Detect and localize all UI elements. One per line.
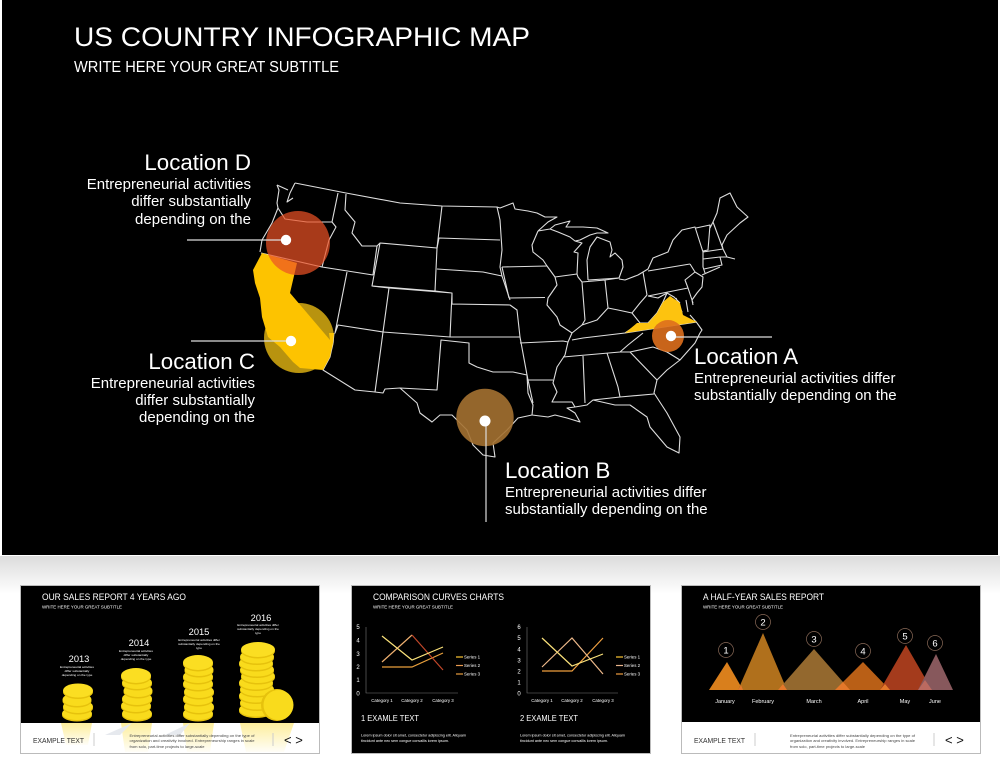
year label 2014: Entrepreneurial activities xyxy=(119,649,153,653)
numbered markers: 2 xyxy=(760,618,766,628)
panel: half-year sales thumbnail xyxy=(682,586,980,754)
leader line and dot: location D xyxy=(187,235,291,245)
line chart 1: 3 xyxy=(356,652,360,658)
month labels: March xyxy=(806,699,822,705)
line chart 1: Category 1 xyxy=(371,698,393,703)
year label 2013: Entrepreneurial activities xyxy=(60,665,94,669)
chart 1 caption: Lorem ipsum dolor sit amet, consectetur adipiscing elit. Aliquam xyxy=(361,732,466,738)
text block: location B: Entrepreneurial activities differ xyxy=(505,484,706,501)
footer description: Entrepreneurial activities differ substantially depending on the type of xyxy=(130,733,255,738)
line chart 2: 6 xyxy=(517,625,521,631)
footer arrows: < > xyxy=(945,732,964,748)
line chart 1: 2 xyxy=(356,665,360,671)
year label 2013: 2013 xyxy=(69,654,89,664)
subheading: WRITE HERE YOUR GREAT SUBTITLE xyxy=(373,604,453,610)
line chart 2: 0 xyxy=(517,692,521,698)
footer description: Entrepreneurial activities differ substantially depending on the type of xyxy=(790,733,916,738)
panel: comparison curves thumbnail xyxy=(352,586,650,754)
footer description: organization and creativity involved. Entrepreneurship ranges in scale xyxy=(130,738,254,743)
footer description: from solo, part-time projects to large-scale xyxy=(130,744,204,749)
text block: location D: differ substantially xyxy=(131,193,251,210)
subheading: WRITE HERE YOUR GREAT SUBTITLE xyxy=(703,604,783,610)
chart 1 caption xyxy=(361,714,466,743)
year label 2016: type xyxy=(255,631,261,635)
panel: sales report thumbnail xyxy=(20,586,320,754)
year label 2015: Entrepreneurial activities differ xyxy=(178,638,220,642)
year label 2015: substantially depending on the xyxy=(178,642,220,646)
leader line and dot: location A xyxy=(666,331,772,341)
chart 2 caption: tincidunt ante nec sem congue convallis lorem ipsum. xyxy=(520,738,608,743)
footer description xyxy=(130,733,255,749)
line chart 2: 4 xyxy=(517,648,521,654)
marker circle: location A xyxy=(652,320,684,352)
large leaning coin xyxy=(261,689,294,721)
numbered markers: 6 xyxy=(932,638,938,650)
text block: location A: Location A xyxy=(694,344,798,369)
year label 2015: type xyxy=(196,646,202,650)
line chart 2: 1 xyxy=(517,680,521,686)
line chart 2: Series 3 xyxy=(624,672,641,676)
chart 1 caption: tincidunt ante nec sem congue convallis lorem ipsum. xyxy=(361,738,449,743)
line chart 2: Series 1 xyxy=(624,654,641,660)
line chart 2: 5 xyxy=(517,636,521,642)
marker circle: location C xyxy=(264,303,334,373)
line chart 2: Category 3 xyxy=(592,698,614,703)
year label 2016: 2016 xyxy=(251,613,271,623)
triangle chart xyxy=(709,633,953,690)
line chart 1: Series 2 xyxy=(464,663,481,668)
chart 1 caption: 1 EXAMLE TEXT xyxy=(361,714,419,723)
month labels: April xyxy=(857,699,869,705)
line chart 1: 0 xyxy=(356,692,360,698)
state highlight: Virginia xyxy=(625,296,697,333)
numbered markers: 1 xyxy=(723,646,729,656)
year label 2016: Entrepreneurial activities differ xyxy=(237,623,279,627)
title: US COUNTRY INFOGRAPHIC MAP xyxy=(74,22,530,52)
year label 2013: differ substantially xyxy=(65,669,90,673)
heading: A HALF-YEAR SALES REPORT xyxy=(703,592,825,602)
text block: location A xyxy=(694,344,897,404)
marker circle: location B xyxy=(456,389,514,446)
text block: location C: differ substantially xyxy=(135,392,255,409)
line chart 1: 1 xyxy=(356,678,360,684)
footer label: EXAMPLE TEXT xyxy=(694,736,746,745)
footer arrows: < > xyxy=(284,732,303,748)
line chart 1: Category 3 xyxy=(432,698,454,703)
numbered markers: 4 xyxy=(860,646,866,658)
text block: location C: depending on the xyxy=(139,409,255,426)
text block: location B xyxy=(505,458,708,518)
heading: OUR SALES REPORT 4 YEARS AGO xyxy=(42,592,186,602)
line chart 1: 4 xyxy=(356,638,360,644)
year label 2015 xyxy=(178,627,220,650)
panel: main US map slide xyxy=(2,0,998,555)
text block: location C: Entrepreneurial activities xyxy=(91,375,255,392)
chart 2 caption: Lorem ipsum dolor sit amet, consectetur adipiscing elit. Aliquam xyxy=(520,732,625,738)
leader line and dot: location C xyxy=(191,336,296,346)
year label 2013: depending on the type xyxy=(62,673,93,677)
marker circle: location D xyxy=(266,211,330,275)
text block: location C xyxy=(91,349,255,426)
line chart 2: Series 2 xyxy=(624,663,641,668)
text block: location D: Entrepreneurial activities xyxy=(87,176,251,193)
month labels: January xyxy=(715,699,735,705)
line chart 1: Series 3 xyxy=(464,672,481,676)
numbered markers xyxy=(718,614,942,658)
text block: location A: substantially depending on the xyxy=(694,387,897,404)
line chart 2: Category 2 xyxy=(561,698,583,703)
line chart 2: 3 xyxy=(517,658,521,664)
year label 2013 xyxy=(60,654,94,677)
subheading: WRITE HERE YOUR GREAT SUBTITLE xyxy=(42,604,122,610)
numbered markers: 5 xyxy=(902,632,908,642)
heading: COMPARISON CURVES CHARTS xyxy=(373,592,504,602)
text block: location D: Location D xyxy=(144,150,251,175)
line chart 1: Series 1 xyxy=(464,654,481,660)
text block: location D: depending on the xyxy=(135,211,251,228)
line chart 2 xyxy=(517,625,641,703)
footer label: EXAMPLE TEXT xyxy=(33,736,85,745)
numbered markers: 3 xyxy=(811,634,817,646)
text block: location C: Location C xyxy=(148,349,255,374)
state highlight: California xyxy=(253,253,334,370)
month labels xyxy=(715,699,941,705)
coin stack 2016 xyxy=(239,642,275,718)
line chart 1: 5 xyxy=(356,625,360,631)
line chart 1: Category 2 xyxy=(401,698,423,703)
US map state outlines xyxy=(260,183,748,457)
month labels: February xyxy=(752,699,774,705)
month labels: May xyxy=(900,699,910,705)
leader line and dot: location B xyxy=(480,416,490,522)
line chart 1 xyxy=(356,625,481,703)
footer reflection of coins xyxy=(61,723,294,752)
year label 2014: 2014 xyxy=(129,638,149,648)
text block: location B: Location B xyxy=(505,458,610,483)
text block: location B: substantially depending on the xyxy=(505,501,708,518)
chart 2 caption xyxy=(520,714,625,743)
line chart 2: Category 1 xyxy=(531,698,553,703)
year label 2014: depending on the type xyxy=(121,657,152,661)
text block: location A: Entrepreneurial activities differ xyxy=(694,370,896,387)
subtitle: WRITE HERE YOUR GREAT SUBTITLE xyxy=(74,59,339,76)
year label 2016: substantially depending on the xyxy=(237,627,279,631)
line chart 2: 2 xyxy=(517,670,521,676)
coin stack 2014 xyxy=(121,668,152,722)
chart 2 caption: 2 EXAMLE TEXT xyxy=(520,714,578,723)
month labels: June xyxy=(929,699,941,705)
year label 2015: 2015 xyxy=(189,627,209,637)
text block: location D xyxy=(87,150,251,228)
footer description: from solo, part-time projects to large-scale xyxy=(790,744,865,749)
coin stack 2013 xyxy=(62,684,93,722)
year label 2016 xyxy=(237,613,279,635)
footer description: organization and creativity involved. Entrepreneurship ranges in scale xyxy=(790,738,915,743)
coin stack 2015 xyxy=(183,655,214,722)
year label 2014: differ substantially xyxy=(124,653,149,657)
year label 2014 xyxy=(119,638,153,661)
footer description xyxy=(790,733,916,749)
